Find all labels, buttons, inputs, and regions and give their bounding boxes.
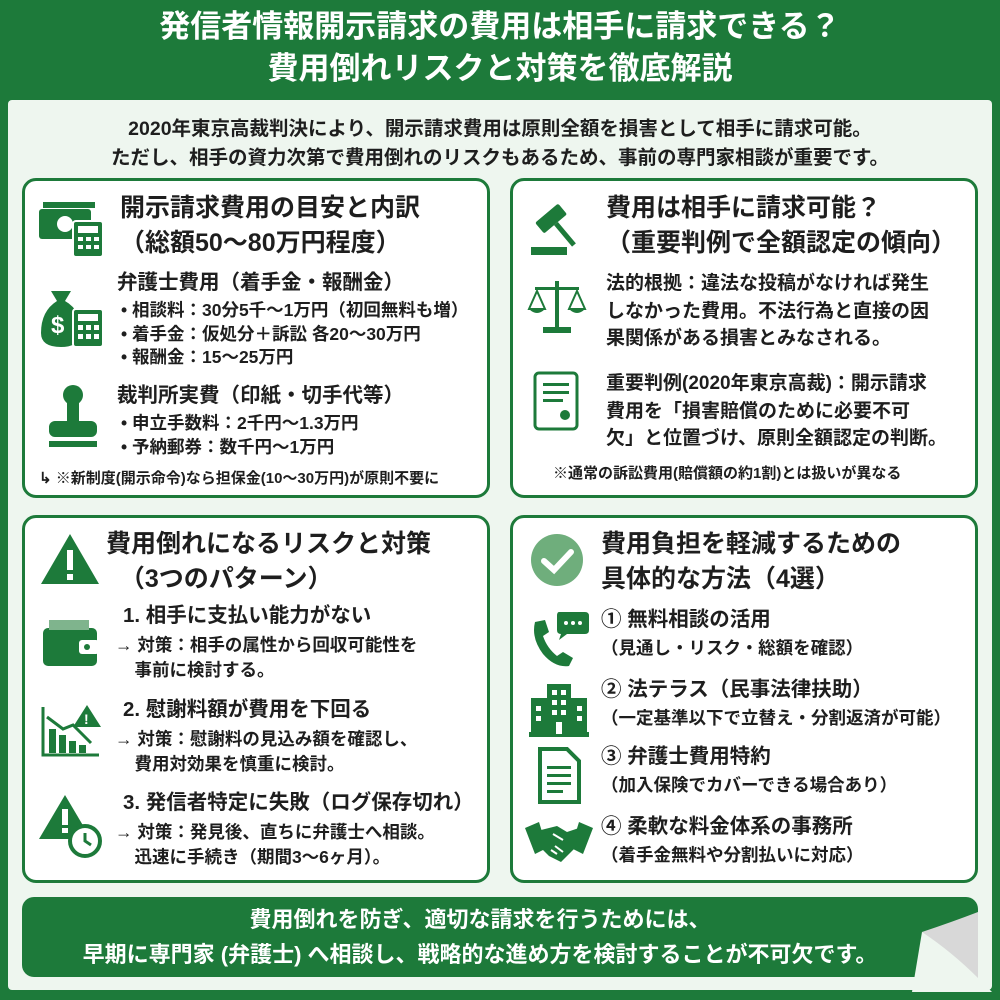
heading xyxy=(120,194,420,257)
section: lawyer fees: • 相談料：30分5千〜1万円（初回無料も増） xyxy=(121,300,468,320)
heading: 費用倒れになるリスクと対策 xyxy=(106,530,431,558)
risk 3: → 対策：発見後、直ちに弁護士へ相談。 xyxy=(115,822,435,842)
icon: declining chart: ! xyxy=(84,711,89,727)
section: lawyer fees: 弁護士費用（着手金・報酬金） xyxy=(117,271,404,294)
text: key precedent: 重要判例(2020年東京高裁)：開示請求 xyxy=(606,373,927,394)
panel: costs breakdown xyxy=(22,178,490,498)
icon: wallet xyxy=(43,620,97,666)
risk 3: 3. 発信者特定に失敗（ログ保存切れ） xyxy=(123,791,474,814)
intro text: ただし、相手の資力次第で費用倒れのリスクもあるため、事前の専門家相談が重要です。 xyxy=(111,147,889,169)
section: lawyer fees xyxy=(117,271,468,367)
icon: warning xyxy=(41,534,99,584)
icon: money bag: $ xyxy=(51,312,65,339)
section: court fees: • 予納郵券：数千円〜1万円 xyxy=(121,436,334,456)
note: security deposit: ↳ ※新制度(開示命令)なら担保金(10〜30万円)が原則不要に xyxy=(39,470,439,487)
heading: （総額50〜80万円程度） xyxy=(120,229,401,257)
section: court fees xyxy=(117,384,404,456)
footer callout: 早期に専門家 (弁護士) へ相談し、戦略的な進め方を検討することが不可欠です。 xyxy=(83,942,877,967)
item 3 xyxy=(601,745,897,795)
section: court fees: 裁判所実費（印紙・切手代等） xyxy=(117,384,404,407)
risk 2 xyxy=(115,698,417,774)
text: legal basis: しなかった費用。不法行為と直接の因 xyxy=(606,300,929,322)
item 1 xyxy=(601,608,863,658)
risk 2: 2. 慰謝料額が費用を下回る xyxy=(123,698,371,721)
text: legal basis: 果関係がある損害とみなされる。 xyxy=(606,328,891,349)
heading xyxy=(606,194,956,257)
icon: money bag xyxy=(41,291,102,347)
text: key precedent: 費用を「損害賠償のために必要不可 xyxy=(606,400,910,422)
risk 3: 迅速に手続き（期間3〜6ヶ月）。 xyxy=(134,847,390,867)
icon: document xyxy=(538,747,581,804)
heading xyxy=(601,530,901,593)
title: 発信者情報開示請求の費用は相手に請求できる？ xyxy=(159,9,841,44)
heading: 開示請求費用の目安と内訳 xyxy=(120,194,420,222)
heading: （3つのパターン） xyxy=(120,565,333,593)
icon: handshake xyxy=(525,822,593,862)
icon: document scroll xyxy=(534,372,578,430)
item 1: （見通し・リスク・総額を確認） xyxy=(601,638,863,658)
section: court fees: • 申立手数料：2千円〜1.3万円 xyxy=(121,413,359,433)
item 1: ① 無料相談の活用 xyxy=(601,608,771,631)
text: legal basis xyxy=(606,272,929,349)
text: key precedent xyxy=(606,372,947,449)
panel: claimable xyxy=(510,178,978,498)
heading: 具体的な方法（4選） xyxy=(601,565,840,593)
risk 1 xyxy=(115,604,417,680)
panel: risks xyxy=(22,515,490,883)
footer callout xyxy=(22,897,978,977)
risk 2: 費用対効果を慎重に検討。 xyxy=(134,754,344,774)
icon: phone chat xyxy=(534,612,589,666)
heading: （重要判例で全額認定の傾向） xyxy=(606,229,956,257)
footer callout: 費用倒れを防ぎ、適切な請求を行うためには、 xyxy=(250,907,710,932)
item 2: ② 法テラス（民事法律扶助） xyxy=(601,678,873,701)
icon: building xyxy=(529,684,589,737)
heading: 費用負担を軽減するための xyxy=(601,530,901,558)
item 4: （着手金無料や分割払いに対応） xyxy=(601,845,864,865)
icon: check circle xyxy=(531,534,583,586)
risk 2: → 対策：慰謝料の見込み額を確認し、 xyxy=(115,729,417,749)
section: lawyer fees: • 着手金：仮処分＋訴訟 各20〜30万円 xyxy=(121,324,421,344)
icon: declining chart xyxy=(42,705,101,756)
item 3: （加入保険でカバーできる場合あり） xyxy=(601,775,897,795)
panel: reduce burden xyxy=(510,515,978,883)
title: 費用倒れリスクと対策を徹底解説 xyxy=(268,51,732,86)
item 4: ④ 柔軟な料金体系の事務所 xyxy=(601,815,853,838)
intro text xyxy=(111,118,889,169)
icon: money & calculator xyxy=(39,202,102,256)
section: lawyer fees: • 報酬金：15〜25万円 xyxy=(121,347,293,367)
item 4 xyxy=(601,815,864,865)
title xyxy=(159,9,841,86)
text: legal basis: 法的根拠：違法な投稿がなければ発生 xyxy=(606,273,929,294)
icon: gavel xyxy=(531,204,576,255)
icon: scales xyxy=(528,281,586,333)
note: ※通常の訴訟費用(賠償額の約1割)とは扱いが異なる xyxy=(553,465,901,482)
text: key precedent: 欠」と位置づけ、原則全額認定の判断。 xyxy=(606,428,947,449)
heading: 費用は相手に請求可能？ xyxy=(606,194,881,222)
item 2 xyxy=(601,678,951,728)
risk 1: 事前に検討する。 xyxy=(134,660,274,680)
risk 1: → 対策：相手の属性から回収可能性を xyxy=(115,635,417,655)
item 3: ③ 弁護士費用特約 xyxy=(601,745,771,768)
item 2: （一定基準以下で立替え・分割返済が可能） xyxy=(601,708,951,728)
icon: warning clock xyxy=(39,795,102,858)
page curl xyxy=(912,912,992,992)
icon: stamp xyxy=(49,385,97,447)
risk 1: 1. 相手に支払い能力がない xyxy=(123,604,371,627)
intro text: 2020年東京高裁判決により、開示請求費用は原則全額を損害として相手に請求可能。 xyxy=(128,118,872,140)
risk 3 xyxy=(115,791,474,867)
heading xyxy=(106,530,431,593)
